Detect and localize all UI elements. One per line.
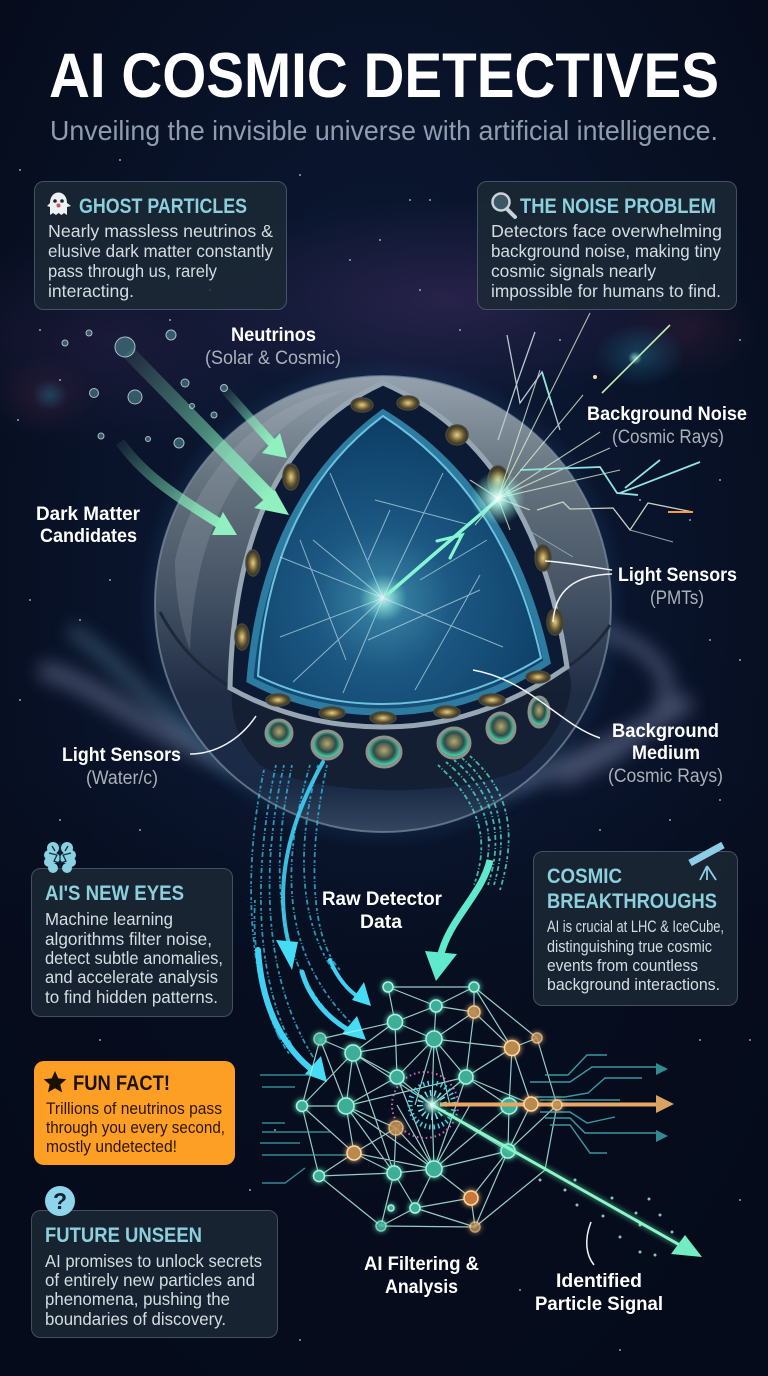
icon: telescope — [690, 845, 723, 880]
data stream: left — [251, 765, 360, 1060]
central glow — [359, 574, 407, 622]
nodes: teal — [296, 982, 517, 1231]
panel: ghost particles — [34, 182, 286, 310]
panel: future unseen — [32, 1186, 278, 1338]
shell highlight — [175, 390, 345, 650]
label: neutrinos: Neutrinos — [231, 324, 316, 346]
arrow head: neutrino large — [254, 490, 289, 515]
label: light sensors PMTs: Light Sensors — [618, 564, 737, 586]
body text: AI is crucial at LHC & IceCube, — [547, 918, 724, 936]
nebula swirl around sphere — [40, 630, 690, 798]
label: identified signal: Identified — [556, 1270, 642, 1292]
label: identified signal — [535, 1270, 663, 1315]
network edges — [302, 987, 557, 1227]
body text — [48, 221, 273, 301]
icon: ghost — [47, 192, 71, 215]
heading: BREAKTHROUGHS — [547, 890, 717, 913]
arrow: raw data to network — [440, 860, 490, 958]
core swirl — [392, 1072, 458, 1138]
label: raw detector data: Data — [360, 911, 402, 933]
label: AI filtering: AI Filtering & — [364, 1253, 479, 1275]
label: background noise — [587, 403, 747, 448]
label: dark matter candidates — [36, 503, 140, 547]
label: light sensors PMTs — [618, 564, 737, 609]
body text: mostly undetected! — [46, 1137, 177, 1156]
heading: AI'S NEW EYES — [45, 882, 184, 905]
main sensors — [266, 697, 549, 767]
equator seam — [160, 612, 610, 688]
body text: boundaries of discovery. — [45, 1309, 226, 1329]
arrow heads: data lines — [656, 1063, 668, 1142]
arrows: data flow — [258, 762, 360, 1072]
inner chamber — [250, 413, 547, 712]
body text: detect subtle anomalies, — [45, 948, 223, 968]
label: light sensors water: (Water/c) — [86, 768, 158, 789]
label: dark matter candidates: Dark Matter — [36, 503, 140, 525]
body text: background noise, making tiny — [491, 241, 721, 261]
label: AI filtering — [364, 1253, 479, 1298]
arrow: identified signal — [421, 1094, 702, 1257]
arrow head: mint — [425, 951, 457, 981]
label: identified signal: Particle Signal — [535, 1293, 663, 1315]
body text — [45, 909, 223, 1007]
body text: Machine learning — [45, 909, 173, 929]
data stream: right — [438, 756, 509, 890]
detected particle arrow — [388, 500, 497, 594]
label: background medium: Background — [612, 720, 719, 742]
lower chamber — [232, 668, 571, 790]
body text: distinguishing true cosmic — [547, 938, 712, 956]
label: AI filtering: Analysis — [385, 1276, 458, 1298]
arrow: dark matter — [120, 442, 222, 525]
nodes: orange — [347, 1006, 562, 1232]
panel: the noise problem — [478, 182, 736, 310]
signal particles — [540, 1180, 672, 1255]
label: light sensors water — [62, 744, 181, 789]
body text: pass through us, rarely — [48, 261, 217, 281]
heading: THE NOISE PROBLEM — [520, 195, 716, 218]
body text: AI promises to unlock secrets — [45, 1251, 262, 1271]
subtitle: Unveiling the invisible universe with artificial intelligence. — [50, 115, 718, 146]
glass shell — [155, 376, 611, 832]
data lines: right — [530, 1055, 660, 1153]
body text: background interactions. — [547, 976, 720, 994]
detector sphere — [138, 313, 700, 849]
body text: algorithms filter noise, — [45, 929, 212, 949]
body text: events from countless — [547, 957, 698, 975]
body text: cosmic signals nearly — [491, 261, 656, 281]
icon: magnifier — [492, 194, 515, 217]
body text — [491, 221, 722, 301]
icon: star — [44, 1071, 66, 1092]
arrow head: dark matter — [212, 512, 237, 535]
body text: elusive dark matter constantly — [48, 241, 273, 261]
particle tracks — [280, 473, 503, 693]
neural network — [260, 982, 674, 1232]
incoming particles — [62, 330, 228, 448]
heading: FUTURE UNSEEN — [45, 1224, 202, 1247]
panel: AI's new eyes — [32, 842, 232, 1016]
label: neutrinos — [205, 324, 341, 369]
arrow: neutrino small — [225, 390, 272, 443]
panel: fun fact — [34, 1061, 235, 1165]
outer frame — [230, 383, 567, 727]
label: background medium: (Cosmic Rays) — [608, 766, 723, 787]
heading — [547, 865, 717, 913]
body text: and accelerate analysis — [45, 967, 218, 987]
panel: cosmic breakthroughs — [534, 845, 738, 1006]
body text: Detectors face overwhelming — [491, 221, 722, 241]
label: dark matter candidates: Candidates — [40, 525, 137, 547]
label: background medium — [608, 720, 723, 787]
label: raw detector data — [322, 888, 442, 933]
arrow head: neutrino small — [262, 433, 287, 458]
body text — [547, 918, 724, 994]
chamber inner edge — [258, 416, 541, 704]
data lines: left — [260, 1075, 350, 1183]
leader lines — [190, 561, 612, 1265]
body text: to find hidden patterns. — [45, 987, 218, 1007]
rim sensors — [235, 396, 563, 724]
arrow: rejected noise — [440, 1095, 674, 1113]
label: background medium: Medium — [632, 742, 700, 764]
label: light sensors PMTs: (PMTs) — [650, 588, 704, 609]
arrow: neutrino large — [128, 352, 270, 497]
body text — [46, 1099, 225, 1156]
label: background noise: Background Noise — [587, 403, 747, 425]
body text: of entirely new particles and — [45, 1270, 255, 1290]
body text — [45, 1251, 262, 1329]
heading: FUN FACT! — [73, 1072, 170, 1095]
collision burst — [470, 313, 700, 557]
icon: question mark — [45, 1186, 75, 1216]
heading: GHOST PARTICLES — [79, 195, 247, 218]
body text: interacting. — [48, 281, 134, 301]
body text: impossible for humans to find. — [491, 281, 721, 301]
label: background noise: (Cosmic Rays) — [612, 427, 724, 448]
stray cosmic ray — [593, 325, 693, 512]
icon: brain — [44, 842, 76, 873]
icon: question mark: ? — [53, 1188, 67, 1214]
label: raw detector data: Raw Detector — [322, 888, 442, 910]
body text: Trillions of neutrinos pass — [46, 1099, 222, 1118]
body text: through you every second, — [46, 1118, 225, 1137]
body text: phenomena, pushing the — [45, 1289, 230, 1309]
label: neutrinos: (Solar & Cosmic) — [205, 348, 341, 369]
arrow heads: blue — [276, 940, 371, 1082]
label: light sensors water: Light Sensors — [62, 744, 181, 766]
heading: COSMIC — [547, 865, 622, 888]
body text: Nearly massless neutrinos & — [48, 221, 273, 241]
